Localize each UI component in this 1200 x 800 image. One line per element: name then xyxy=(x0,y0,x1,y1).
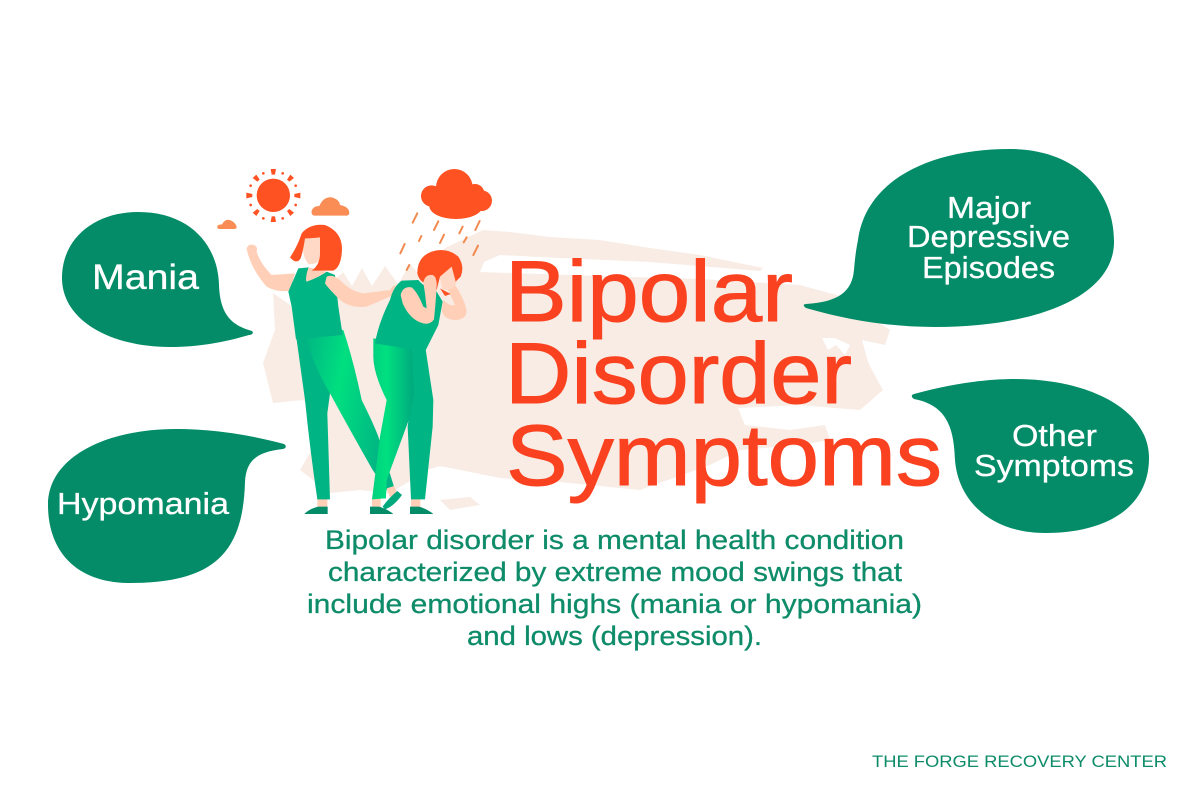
icon: rain cloud xyxy=(421,169,492,219)
title: Disorder xyxy=(505,326,852,422)
description text xyxy=(307,525,922,651)
icon: orange clouds xyxy=(217,197,349,229)
speech bubble: Major Depressive Episodes: Depressive xyxy=(907,219,1070,254)
title xyxy=(505,244,942,504)
speech bubble: Other Symptoms: Symptoms xyxy=(974,448,1134,483)
speech bubble: Mania xyxy=(62,212,253,347)
icon: rain drops xyxy=(400,213,480,270)
description text: include emotional highs (mania or hypomania) xyxy=(307,589,922,619)
speech bubble: Major Depressive Episodes xyxy=(804,149,1114,327)
title: Bipolar xyxy=(505,244,793,340)
speech bubble: Major Depressive Episodes: Episodes xyxy=(922,250,1055,285)
speech bubble: Hypomania xyxy=(48,429,286,583)
background brush stroke xyxy=(263,230,890,510)
description text: Bipolar disorder is a mental health condition xyxy=(325,525,904,555)
title: Symptoms xyxy=(506,408,942,504)
description text: and lows (depression). xyxy=(467,621,762,651)
description text: characterized by extreme mood swings that xyxy=(328,557,903,587)
icon: sun xyxy=(246,169,300,222)
figure: standing woman xyxy=(247,225,402,514)
footer credit: THE FORGE RECOVERY CENTER xyxy=(872,752,1167,771)
speech bubble: Mania: Mania xyxy=(92,258,200,297)
brush stroke gaps xyxy=(822,338,850,355)
speech bubble: Hypomania: Hypomania xyxy=(57,486,230,521)
figure: bent-over woman xyxy=(370,250,467,514)
illustration: two women, sun and rain cloud xyxy=(217,169,492,514)
speech bubble: Other Symptoms: Other xyxy=(1012,418,1097,453)
speech bubble: Other Symptoms xyxy=(912,379,1149,533)
speech bubble: Major Depressive Episodes: Major xyxy=(947,190,1031,225)
